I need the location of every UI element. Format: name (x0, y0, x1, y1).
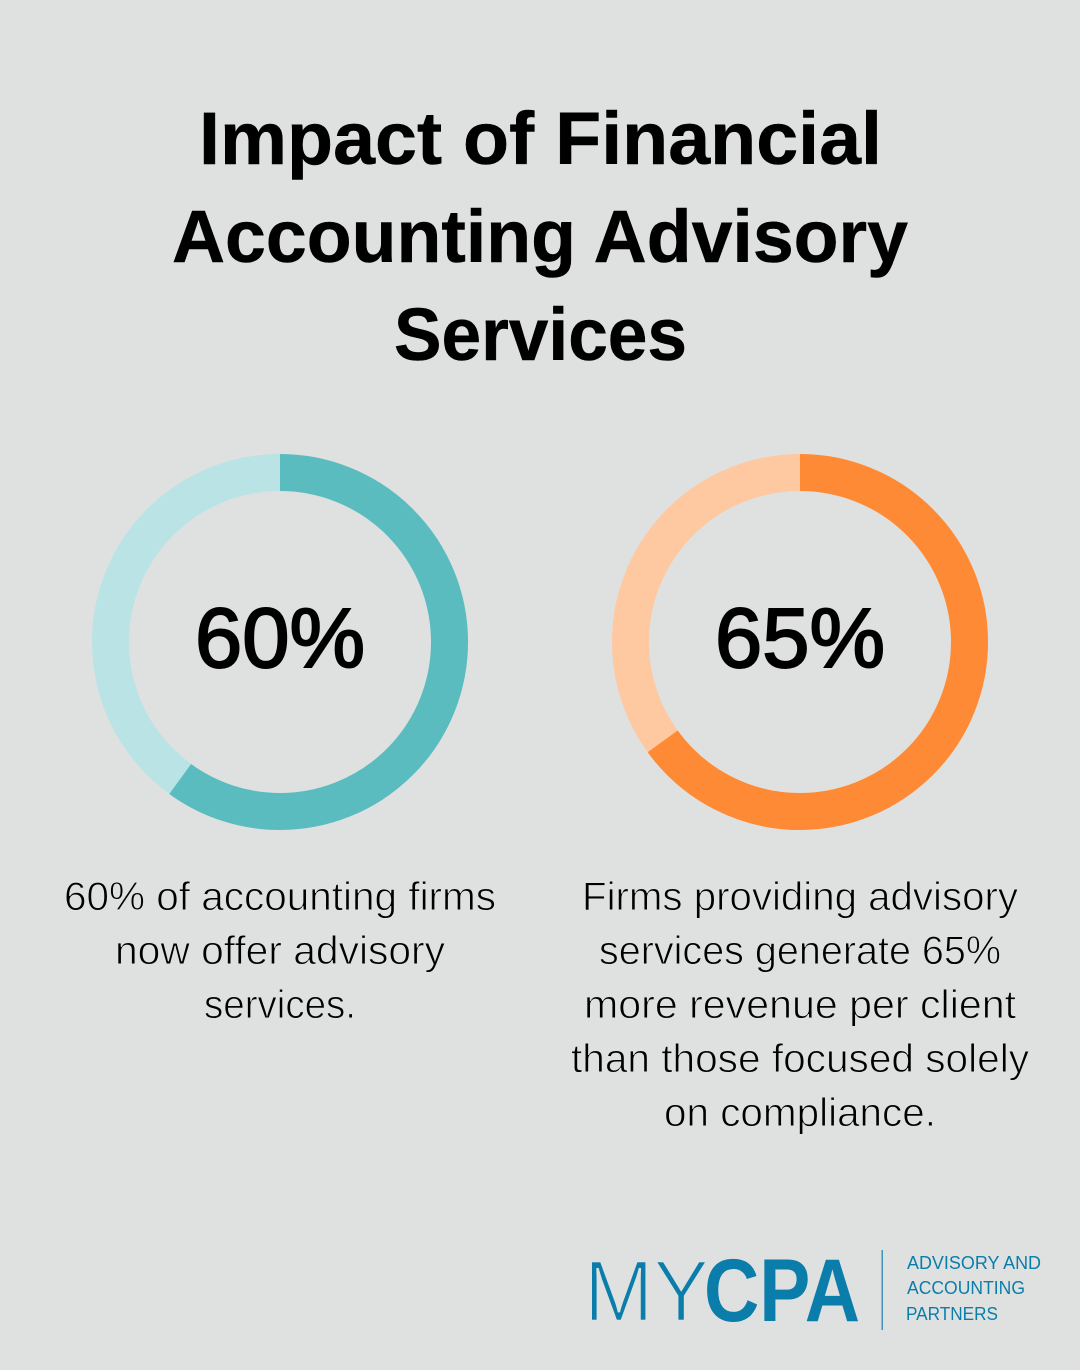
value: 65%: 65% (715, 591, 885, 685)
logo wordmark: MY (584, 1243, 709, 1340)
logo tagline: PARTNERS (906, 1304, 998, 1324)
description: 65%: Firms providing advisory (582, 875, 1018, 919)
panel: 60% statistic (64, 472, 496, 1027)
logo tagline: ACCOUNTING (907, 1278, 1025, 1298)
value: 60%: 60% (195, 591, 365, 685)
donut chart: 65% (630, 472, 970, 812)
panel: 65% statistic (571, 472, 1029, 1135)
logo wordmark (584, 1240, 860, 1340)
description: 65% (571, 875, 1029, 1135)
description: 60%: now offer advisory (115, 929, 445, 973)
description: 65%: more revenue per client (584, 983, 1016, 1027)
description: 65%: services generate 65% (599, 929, 1001, 973)
logo tagline (906, 1253, 1041, 1324)
title (172, 97, 908, 376)
description: 60% (64, 875, 496, 1027)
donut chart: 60% (110, 472, 450, 812)
description: 65%: than those focused solely (571, 1037, 1029, 1081)
logo tagline: ADVISORY AND (907, 1253, 1041, 1273)
logo wordmark: CPA (704, 1240, 860, 1340)
logo: MYCPA (584, 1240, 1041, 1340)
title: Impact of Financial (199, 97, 882, 180)
description: 60%: 60% of accounting firms (64, 875, 496, 919)
description: 65%: on compliance. (664, 1091, 936, 1135)
title: Services (394, 293, 687, 376)
title: Accounting Advisory (172, 195, 908, 278)
description: 60%: services. (204, 983, 356, 1027)
